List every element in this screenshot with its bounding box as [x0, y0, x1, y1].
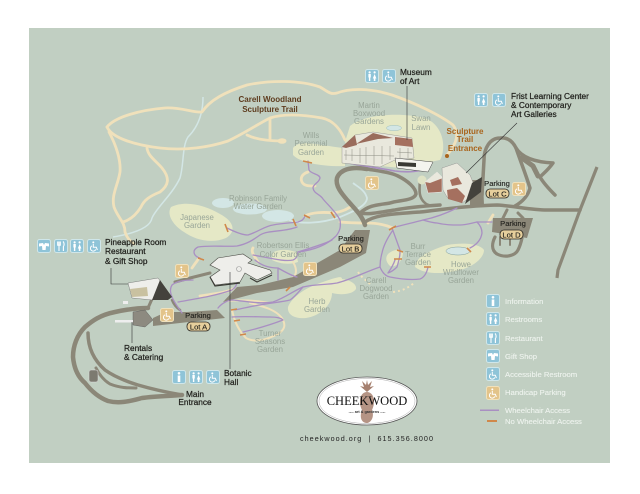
garden labels: Martin: [358, 101, 380, 110]
map icons: [38, 70, 526, 384]
garden labels: Water Garden: [234, 202, 282, 211]
garden labels: Wildflower: [443, 268, 479, 277]
cheekwood logo: [317, 377, 417, 425]
map background panel: [29, 28, 610, 463]
garden labels: Burr: [411, 242, 426, 251]
legend: No Wheelchair Access: [505, 417, 582, 426]
legend: Restrooms: [505, 315, 542, 324]
website and phone: cheekwood.org | 615.356.8000: [300, 434, 434, 443]
garden labels: Garden: [184, 221, 210, 230]
garden labels: Robertson Ellis: [257, 241, 309, 250]
building labels: Botanic: [224, 368, 252, 378]
building labels: Restaurant: [105, 246, 146, 256]
sculpture trail: [107, 81, 493, 341]
parking labels: Parking: [185, 311, 211, 320]
garden labels: Seasons: [255, 337, 285, 346]
trail labels: Sculpture Trail: [242, 105, 298, 114]
garden labels: Garden: [405, 258, 431, 267]
garden labels: Garden: [257, 345, 283, 354]
parking lots: [153, 180, 533, 326]
parking labels: Lot A: [190, 322, 208, 332]
garden labels: Robinson Family: [229, 194, 287, 203]
garden labels: Wills: [303, 131, 319, 140]
building labels: [105, 67, 589, 407]
no wheelchair access markers: [198, 161, 471, 335]
garden labels: Carell: [366, 276, 386, 285]
garden labels: Lawn: [412, 123, 430, 132]
garden labels: Gardens: [354, 117, 384, 126]
trail labels: Sculpture: [447, 127, 484, 136]
botanic hall building: [210, 254, 272, 286]
building labels: & Gift Shop: [105, 256, 148, 266]
trail labels: Carell Woodland: [239, 95, 302, 104]
cheekwood logo: CHEEKWOOD: [327, 394, 407, 408]
water features: [113, 97, 470, 255]
garden labels: Herb: [309, 297, 326, 306]
building labels: Art Galleries: [511, 109, 557, 119]
building labels: & Catering: [124, 352, 164, 362]
parking labels: Parking: [484, 179, 510, 188]
trail labels: [239, 95, 484, 153]
parking labels: Lot D: [502, 230, 521, 240]
garden labels: Perennial: [295, 139, 328, 148]
rentals and catering building: [115, 301, 153, 327]
parking labels: Lot B: [342, 244, 359, 254]
legend: Accessible Restroom: [505, 370, 577, 379]
garden labels: Japanese: [180, 213, 214, 222]
garden labels: Garden: [448, 276, 474, 285]
garden labels: Swan: [411, 114, 431, 123]
garden labels: Garden: [304, 305, 330, 314]
parking labels: [185, 179, 526, 332]
garden labels: Boxwood: [353, 109, 385, 118]
building labels: Frist Learning Center: [511, 91, 589, 101]
legend: Restaurant: [505, 334, 543, 343]
garden labels: Garden: [298, 148, 324, 157]
museum of art building: [342, 132, 433, 172]
garden labels: Dogwood: [360, 284, 392, 293]
dotted trail: [358, 272, 414, 292]
legend: Gift Shop: [505, 352, 537, 361]
gardens: [169, 115, 484, 318]
garden labels: Garden: [363, 292, 389, 301]
legend: Information: [505, 297, 543, 306]
gatehouse: [89, 370, 98, 382]
roads: [73, 138, 597, 402]
garden labels: Turner: [259, 329, 282, 338]
building labels: of Art: [400, 76, 420, 86]
leader lines: [111, 86, 517, 369]
pineapple room building: [128, 278, 172, 300]
building labels: Museum: [400, 67, 432, 77]
frist learning center building: [418, 163, 482, 204]
garden labels: Howe: [451, 260, 471, 269]
parking labels: Parking: [500, 219, 526, 228]
parking labels: Parking: [338, 234, 364, 243]
parking labels: Lot C: [488, 190, 507, 198]
building labels: Pineapple Room: [105, 237, 166, 247]
trail labels: Trail: [457, 135, 473, 144]
building labels: Hall: [224, 377, 238, 387]
garden labels: Color Garden: [260, 250, 306, 259]
wheelchair access paths: [170, 161, 492, 332]
garden labels: [180, 101, 479, 354]
cheekwood logo: ---- art & gardens ----: [349, 410, 386, 414]
building labels: Main: [186, 389, 204, 399]
legend: [480, 294, 582, 426]
legend: Handicap Parking: [505, 388, 566, 397]
sculpture trail entrance marker: [445, 154, 449, 158]
trail labels: Entrance: [448, 144, 483, 153]
legend: Wheelchair Access: [505, 406, 570, 415]
building labels: & Contemporary: [511, 100, 572, 110]
building labels: Rentals: [124, 343, 152, 353]
building labels: Entrance: [178, 397, 212, 407]
garden labels: Terrace: [405, 250, 431, 259]
